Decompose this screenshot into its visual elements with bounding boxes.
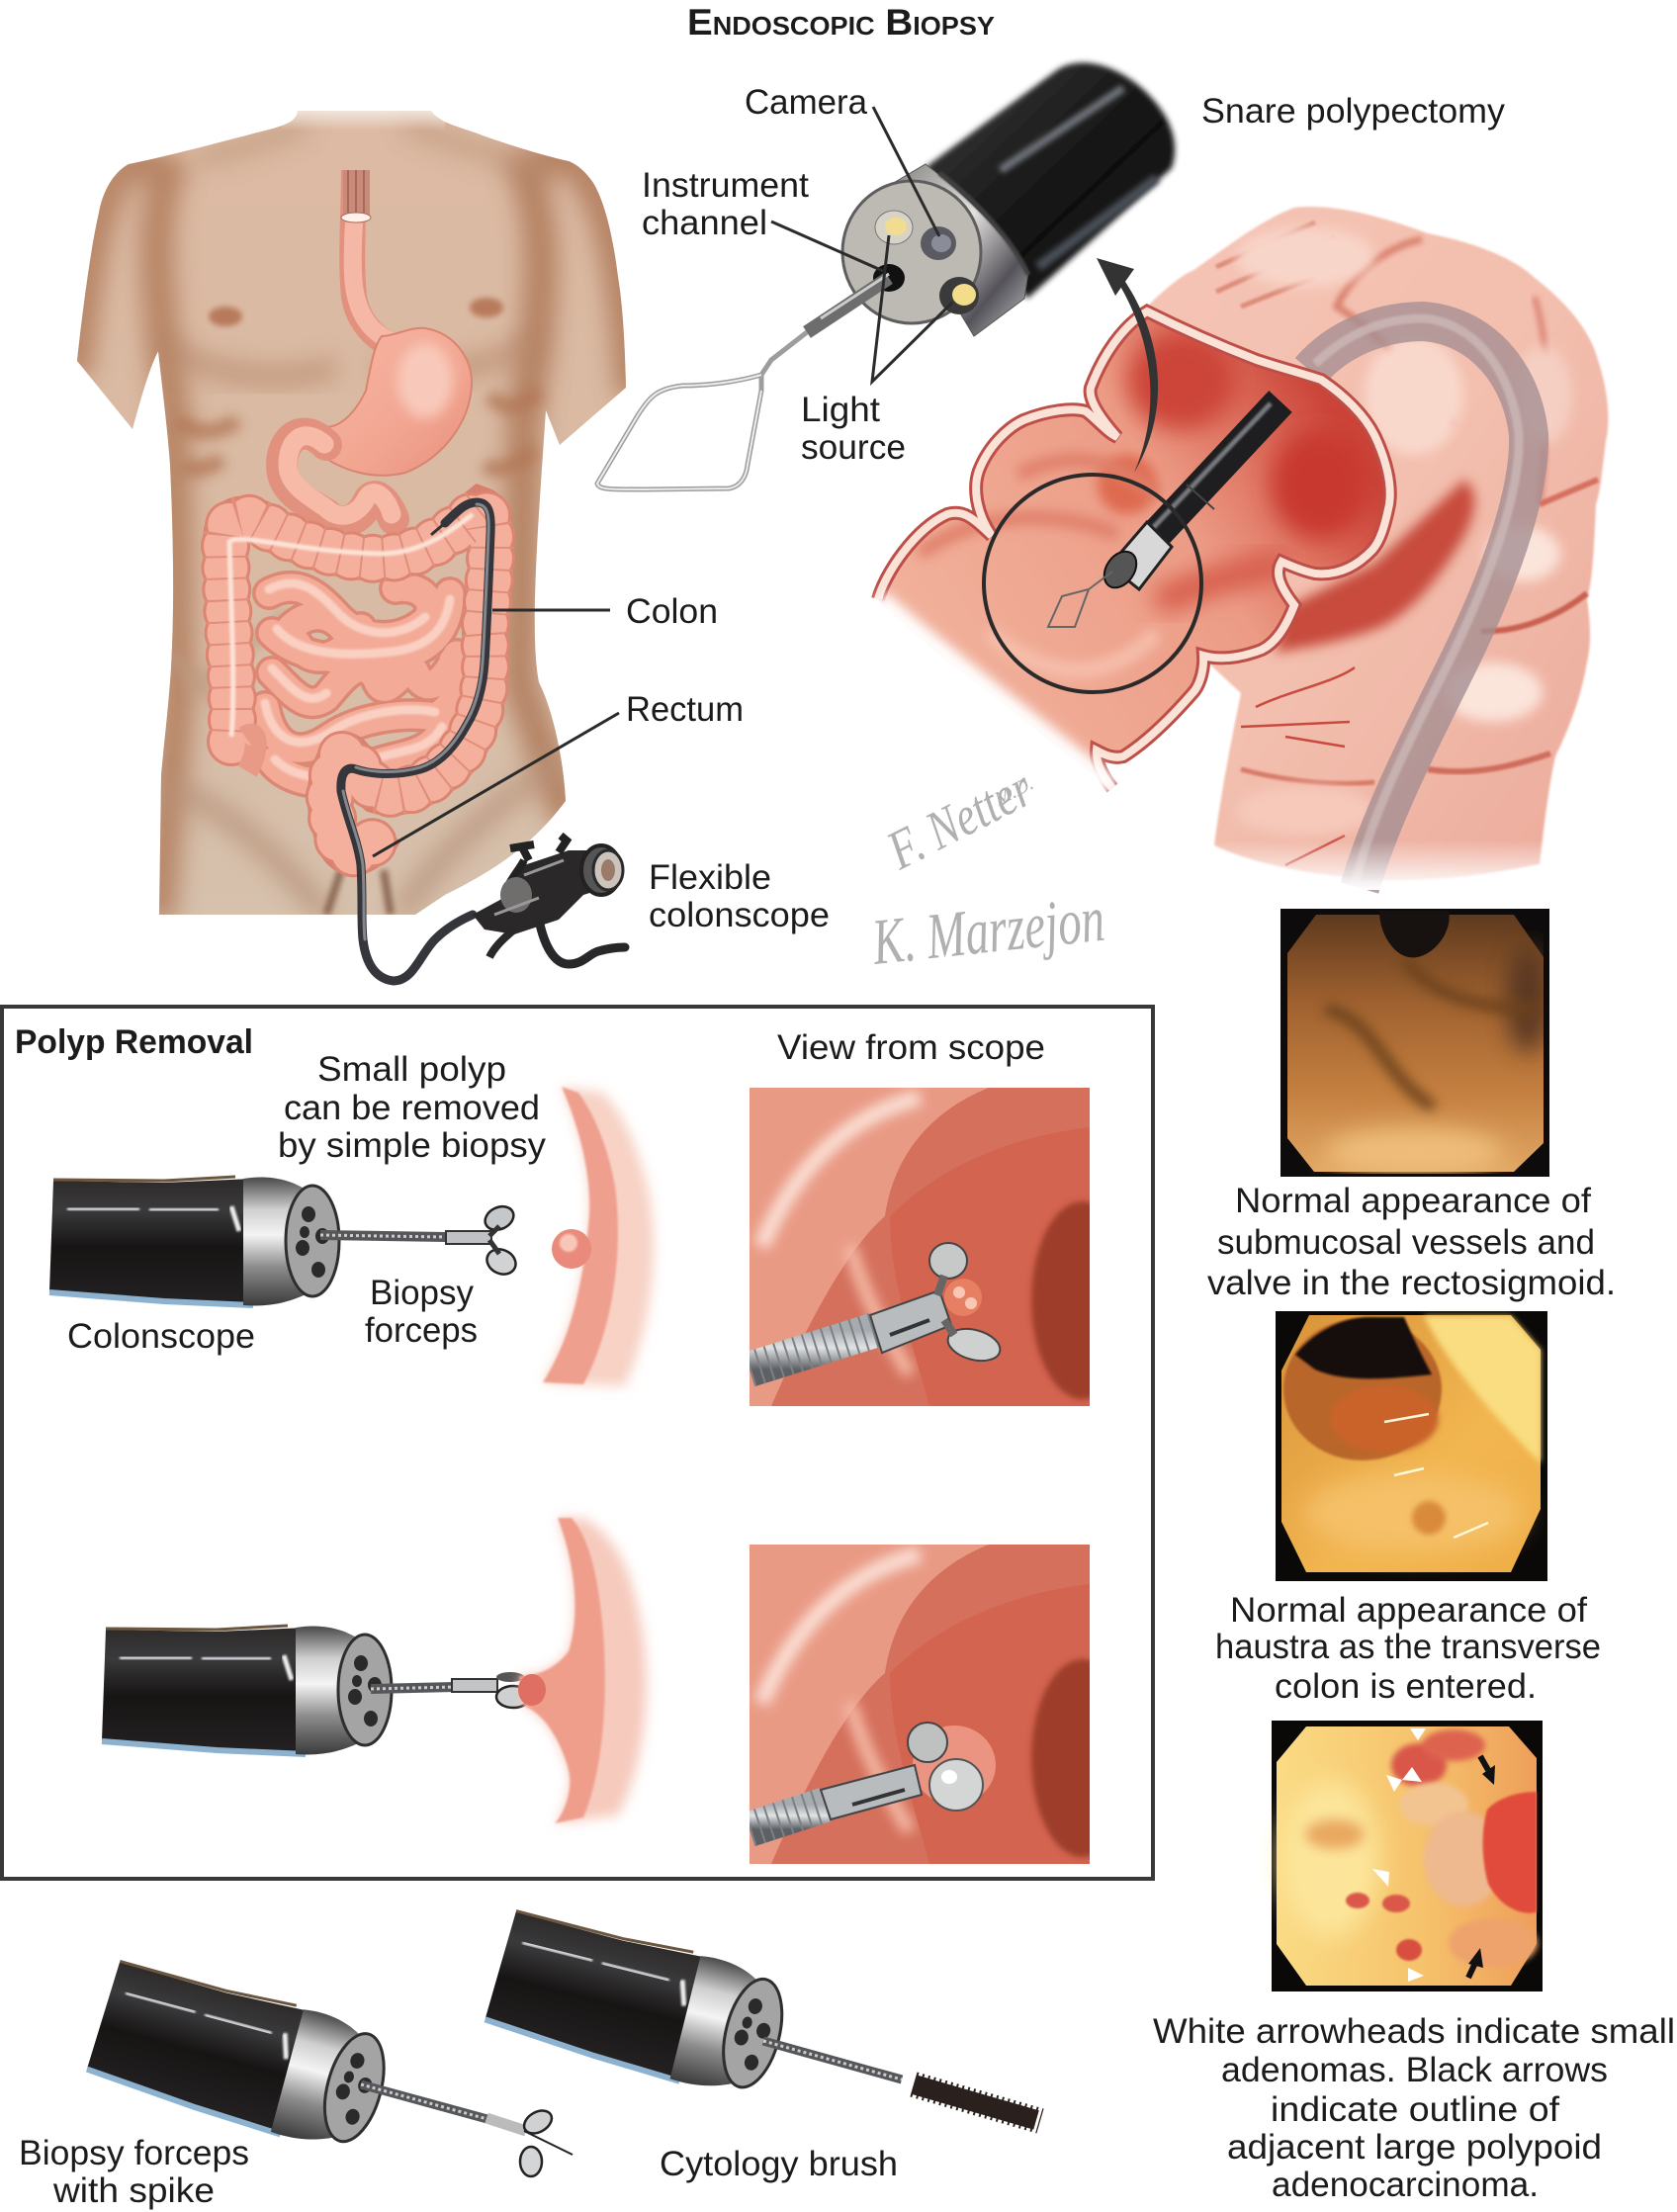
colonoscope grasping polyp xyxy=(102,1626,530,1754)
label: Instrument channel: Instrument xyxy=(642,166,809,205)
panel: polyp removal xyxy=(2,1007,1153,1879)
label: Camera xyxy=(745,83,939,236)
black magnifier circle xyxy=(984,475,1201,692)
label: biopsy forceps with spike: with spike xyxy=(52,2171,215,2210)
label: Instrument channel: channel xyxy=(642,204,767,242)
caption: rectosigmoid xyxy=(1207,1182,1616,1302)
caption: rectosigmoid: Normal appearance of xyxy=(1235,1182,1591,1220)
title: Endoscopic Biopsy xyxy=(687,2,995,43)
signature: F. Netter: M.D. xyxy=(990,772,1037,811)
label: Rectum xyxy=(373,690,744,856)
label: small polyp xyxy=(278,1050,547,1165)
caption: adenomas: adenomas. Black arrows xyxy=(1221,2051,1608,2089)
label: Rectum: Rectum xyxy=(626,690,744,729)
label: cytology brush: Cytology brush xyxy=(660,2145,898,2183)
translucent scope through colon xyxy=(1196,318,1552,890)
flexible colonoscope handle xyxy=(473,836,625,964)
label: Camera: Camera xyxy=(745,83,868,122)
lumen and mucosa xyxy=(878,311,1390,788)
label: Light source: Light xyxy=(801,391,880,429)
label: Instrument channel xyxy=(642,166,883,271)
panel: torso with digestive organs xyxy=(74,99,633,981)
colon outer wall xyxy=(1145,207,1608,880)
label: Flexible colonscope: Flexible xyxy=(649,858,771,897)
label: Flexible colonscope: colonscope xyxy=(649,896,830,934)
label: Snare polypectomy: Snare polypectomy xyxy=(1201,92,1506,131)
label: colonscope: Colonscope xyxy=(67,1317,255,1356)
colon wall with tented polyp xyxy=(518,1518,647,1823)
caption: adenomas: adenocarcinoma. xyxy=(1272,2166,1539,2204)
torso figure xyxy=(74,99,633,920)
photo: adenomas and adenocarcinoma xyxy=(1272,1721,1543,1991)
photo: rectosigmoid xyxy=(1280,909,1549,1177)
caption: adenomas: indicate outline of xyxy=(1271,2090,1559,2129)
caption: rectosigmoid: valve in the rectosigmoid. xyxy=(1207,1264,1616,1302)
scope inside lumen xyxy=(1048,401,1280,627)
label: view from scope: View from scope xyxy=(777,1028,1045,1067)
colonoscope with biopsy forceps xyxy=(49,1177,520,1305)
caption: haustra xyxy=(1215,1591,1601,1706)
caption: adenomas: White arrowheads indicate small xyxy=(1153,2012,1675,2051)
cytology brush instrument xyxy=(482,1907,1040,2121)
colon wall with small polyp xyxy=(543,1087,654,1386)
caption: rectosigmoid: submucosal vessels and xyxy=(1217,1223,1595,1262)
illustration: colon cross-section xyxy=(878,207,1608,890)
signature: K. Marzejon: K. Marzejon xyxy=(868,883,1107,979)
small intestine xyxy=(250,583,458,782)
photo: transverse colon haustra xyxy=(1276,1311,1547,1581)
label: small polyp: Small polyp xyxy=(317,1050,506,1089)
label: Light source xyxy=(801,235,952,467)
label: biopsy forceps: Biopsy xyxy=(370,1274,474,1312)
label: biopsy forceps xyxy=(365,1274,478,1350)
colon xyxy=(225,509,490,852)
label: biopsy forceps with spike: Biopsy forceps xyxy=(19,2134,249,2172)
caption: haustra: Normal appearance of xyxy=(1230,1591,1587,1630)
colonoscope tube in colon xyxy=(341,502,490,981)
label: biopsy forceps: forceps xyxy=(365,1311,478,1350)
label: biopsy forceps with spike xyxy=(19,2134,249,2210)
esophagus and stomach xyxy=(282,170,472,521)
biopsy forceps with spike instrument xyxy=(83,1958,573,2176)
curved arrow to enlarged tip xyxy=(1097,258,1158,473)
label: Flexible colonscope xyxy=(649,858,830,934)
snare scope tip enlarged xyxy=(842,62,1175,336)
caption: adenomas xyxy=(1153,2012,1675,2204)
caption: adenomas: adjacent large polypoid xyxy=(1227,2128,1602,2167)
signature: F. Netter: F. Netter xyxy=(877,757,1042,882)
label: Light source: source xyxy=(801,428,906,467)
label: Colon: Colon xyxy=(626,592,718,631)
caption: haustra: colon is entered. xyxy=(1275,1667,1537,1706)
snare instrument xyxy=(597,274,889,489)
caption: haustra: haustra as the transverse xyxy=(1215,1628,1601,1666)
view from scope: forceps approaching polyp xyxy=(750,1088,1090,1406)
view from scope: forceps closed on polyp xyxy=(750,1545,1090,1864)
heading: Polyp Removal xyxy=(15,1023,253,1061)
label: small polyp: by simple biopsy xyxy=(278,1126,547,1165)
label: small polyp: can be removed xyxy=(284,1089,540,1127)
